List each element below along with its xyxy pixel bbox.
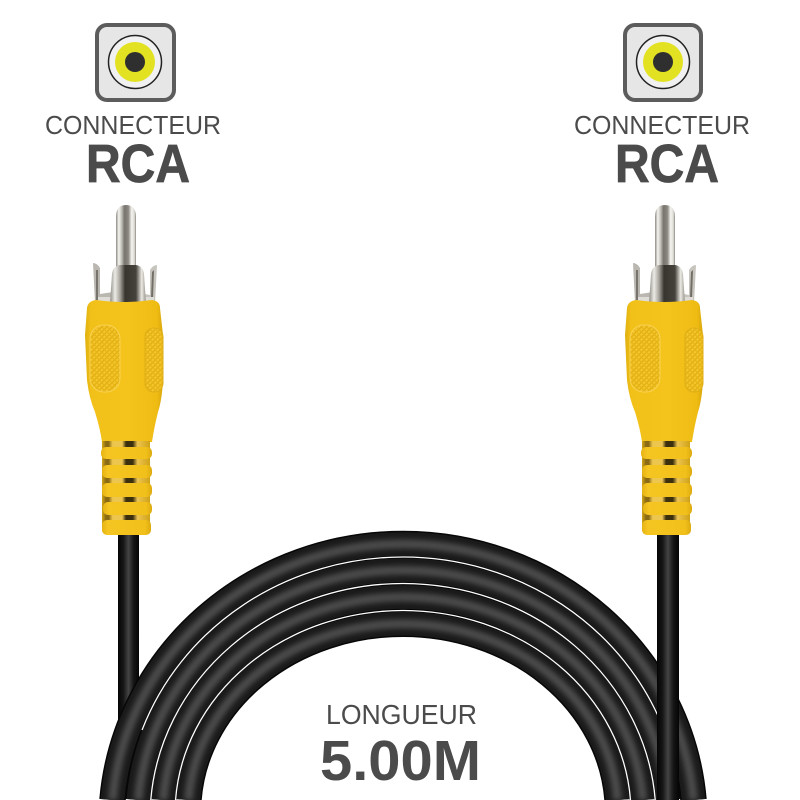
outer loop	[112, 544, 694, 800]
label: cable length: 5.00M	[320, 729, 481, 793]
label: right connecteur: CONNECTEUR	[574, 110, 750, 140]
right collar	[649, 265, 685, 303]
left connector	[85, 205, 163, 535]
right pin	[655, 205, 675, 268]
right prongs	[633, 263, 696, 303]
left grip	[90, 325, 120, 392]
right side grip	[685, 328, 703, 392]
left pin	[116, 205, 136, 268]
label: right RCA: RCA	[615, 134, 719, 194]
label: left RCA: RCA	[86, 134, 190, 194]
icon: left RCA socket	[97, 25, 174, 100]
inner loop	[188, 624, 618, 800]
icon: right RCA socket	[625, 25, 701, 100]
right strain relief	[641, 441, 692, 535]
right cable	[657, 534, 679, 800]
label: longueur: LONGUEUR	[326, 699, 477, 730]
right grip	[630, 325, 660, 392]
left prongs	[93, 263, 157, 303]
left strain relief	[101, 441, 152, 535]
second loop	[138, 570, 668, 800]
third loop	[163, 597, 643, 800]
left body	[85, 300, 163, 442]
right connector	[625, 205, 703, 535]
right body	[625, 300, 703, 442]
left cable	[118, 534, 139, 724]
cable coil	[112, 544, 694, 800]
left collar	[110, 265, 146, 303]
label: left connecteur: CONNECTEUR	[45, 110, 221, 140]
right side grip	[145, 328, 163, 392]
